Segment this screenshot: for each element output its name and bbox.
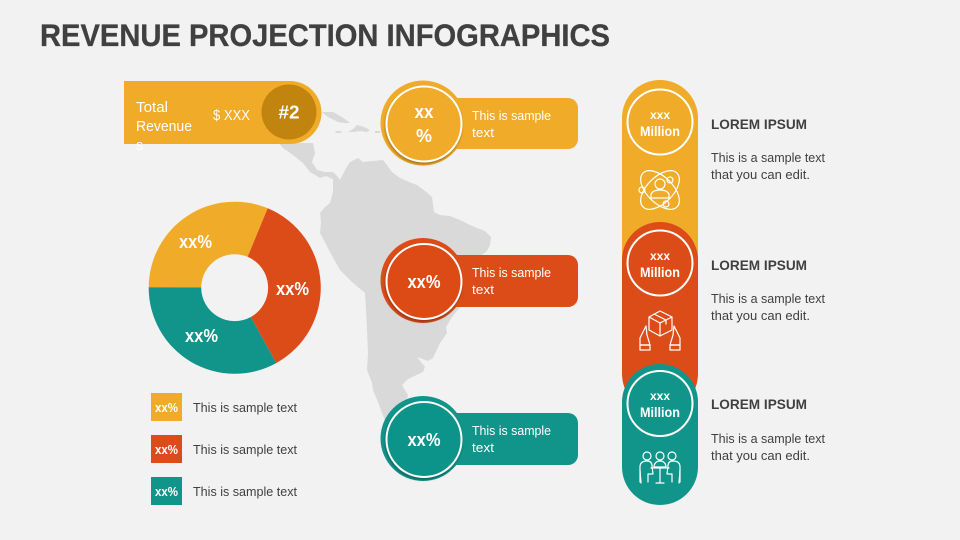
legend — [151, 393, 297, 505]
text block: second lorem ipsum: LOREM IPSUM — [711, 257, 807, 273]
rank badge — [262, 84, 316, 140]
metric circle: Million — [640, 405, 680, 420]
metric circle — [628, 90, 692, 154]
metric circle: Million — [640, 124, 680, 139]
text block: second lorem ipsum: that you can edit. — [711, 308, 810, 323]
panel: yellow stadium — [622, 80, 698, 300]
text block: third lorem ipsum: This is a sample text — [711, 431, 825, 446]
legend item: yellow: This is sample text — [193, 400, 297, 415]
total revenue label: s — [136, 138, 143, 154]
map: South and Central America — [279, 112, 491, 425]
panel: red stadium — [622, 222, 698, 412]
callout: red: This is sample — [472, 265, 551, 280]
legend item: yellow: xx% — [155, 401, 178, 415]
metric circle: xxx — [650, 108, 670, 122]
text block: third lorem ipsum — [711, 396, 825, 463]
donut chart — [149, 202, 321, 374]
callout: red: xx% — [408, 272, 440, 292]
donut labels — [179, 232, 309, 346]
text block: first lorem ipsum: that you can edit. — [711, 167, 810, 182]
legend item: teal — [151, 477, 297, 505]
text block: second lorem ipsum — [711, 257, 825, 323]
icon: person in orbits — [634, 164, 686, 216]
rank badge: #2 — [278, 102, 300, 122]
metric circle: Million — [640, 265, 680, 280]
panel: total revenue pill — [124, 81, 322, 154]
legend item: teal: xx% — [155, 485, 178, 499]
legend item: red — [151, 435, 297, 463]
legend item: yellow — [151, 393, 297, 421]
text block: first lorem ipsum: This is a sample text — [711, 150, 825, 165]
metric circle — [628, 371, 692, 436]
callout: yellow: % — [416, 126, 432, 146]
revenue amount: $ XXX — [213, 108, 250, 124]
donut labels: xx% — [185, 326, 218, 346]
callout: teal — [380, 396, 578, 481]
metric circle — [628, 230, 692, 296]
metric circle: xxx — [650, 249, 670, 263]
icon: people at a table — [640, 452, 680, 483]
text block: second lorem ipsum: This is a sample text — [711, 291, 825, 306]
legend item: teal: This is sample text — [193, 484, 297, 499]
legend item: red: This is sample text — [193, 442, 297, 457]
text block: third lorem ipsum: that you can edit. — [711, 448, 810, 463]
total revenue label — [136, 100, 192, 154]
callout: red: text — [472, 282, 494, 297]
text block: first lorem ipsum: LOREM IPSUM — [711, 116, 807, 132]
metric circle: xxx — [650, 389, 670, 403]
total revenue label: Revenue — [136, 119, 192, 135]
donut labels: xx% — [179, 232, 212, 252]
callout: teal: text — [472, 440, 494, 455]
callout: yellow: xx — [414, 102, 434, 122]
callout: teal: xx% — [408, 430, 440, 450]
legend item: red: xx% — [155, 443, 178, 457]
text block: third lorem ipsum: LOREM IPSUM — [711, 396, 807, 412]
icon: box in hands — [640, 311, 680, 350]
callout: yellow: text — [472, 125, 494, 140]
callout: red — [380, 238, 578, 323]
callout: yellow — [380, 80, 578, 166]
callout: teal: This is sample — [472, 423, 551, 438]
title: REVENUE PROJECTION INFOGRAPHICS — [40, 17, 610, 53]
total revenue label: Total — [136, 100, 168, 116]
panel: teal stadium — [622, 364, 698, 505]
text block: first lorem ipsum — [711, 116, 825, 182]
donut labels: xx% — [276, 279, 309, 299]
callout: yellow: This is sample — [472, 108, 551, 123]
